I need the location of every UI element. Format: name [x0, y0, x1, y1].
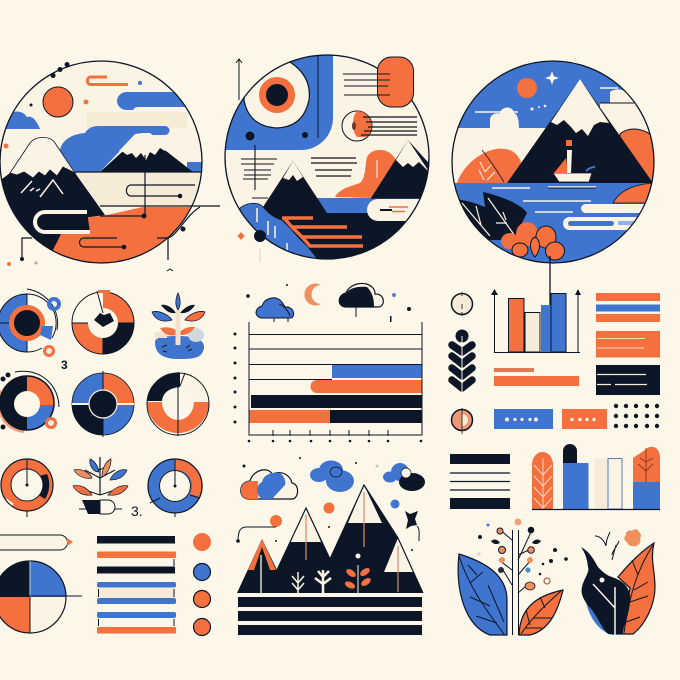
orange text block — [596, 331, 660, 358]
horizontal bar chart — [234, 322, 422, 442]
number 3 upper: 3 — [61, 358, 68, 372]
orange clock icon — [452, 408, 472, 434]
sand band — [75, 172, 205, 207]
bottom marker dot — [254, 230, 266, 242]
water lines — [492, 187, 596, 212]
tick marks — [273, 430, 388, 436]
centre mountain — [263, 161, 327, 228]
stem — [512, 530, 518, 635]
eye — [244, 62, 309, 128]
star — [545, 71, 559, 85]
boat — [548, 140, 596, 188]
orange leaf — [618, 543, 655, 634]
axes — [494, 290, 580, 352]
berries — [477, 518, 550, 590]
target ring — [262, 80, 292, 110]
pill with arrow — [0, 535, 73, 550]
stacked legend bars — [97, 536, 176, 634]
white cloud — [490, 108, 519, 128]
navy ground — [360, 213, 406, 253]
legend circles — [193, 533, 211, 636]
donut 5 — [72, 371, 134, 437]
tri-colour cloud — [241, 470, 298, 499]
bars — [508, 298, 524, 352]
snow cap — [551, 79, 609, 136]
orange diamond — [238, 232, 244, 240]
water strip — [317, 198, 420, 213]
vertical bar chart — [491, 289, 581, 352]
circle outline — [452, 61, 654, 263]
orange blob — [324, 502, 334, 514]
clouds above range — [236, 457, 425, 551]
blue leaf — [458, 554, 507, 635]
navy text block — [596, 365, 660, 395]
donut 9 — [148, 459, 203, 517]
birds — [530, 105, 546, 110]
orange leaf — [519, 590, 563, 635]
peak stems — [306, 492, 398, 592]
tree white — [292, 570, 331, 593]
cream bars — [595, 459, 608, 509]
water — [450, 183, 660, 263]
orange leaf — [532, 452, 553, 509]
navy feather leaf — [449, 330, 475, 393]
sprout in pot — [73, 457, 128, 514]
orange pill — [87, 77, 128, 84]
blue cloud — [310, 460, 354, 492]
legend stripes right — [596, 293, 660, 395]
dark cloud — [339, 283, 383, 307]
left mountain — [2, 168, 105, 250]
sparkles — [478, 535, 568, 575]
orange flower — [624, 529, 641, 546]
mountain — [507, 79, 653, 183]
donut 2 — [72, 290, 134, 354]
snow cap — [10, 137, 75, 178]
mountain range with trees — [237, 485, 423, 635]
white pill label — [367, 199, 425, 221]
twig marks — [595, 532, 619, 560]
heart centre — [94, 313, 114, 327]
orange dotted button — [562, 409, 607, 429]
orange tab — [378, 57, 414, 107]
navy star — [405, 511, 418, 529]
panel: circular mountain and boat landscape — [450, 60, 663, 320]
orange hill — [335, 150, 396, 198]
connector to bar chart — [549, 256, 551, 320]
blue cloud upper right — [117, 92, 190, 110]
botanical left — [458, 518, 568, 635]
blue cloud — [256, 298, 294, 318]
right mountain — [100, 148, 192, 172]
plant pot — [152, 293, 205, 359]
navy leaves — [455, 192, 527, 240]
blue dot — [390, 500, 400, 508]
y labels dots — [234, 332, 236, 424]
sparkles — [246, 284, 411, 322]
donut 6 — [147, 371, 209, 436]
blue cloud left — [6, 112, 40, 129]
quadrant pie — [0, 561, 82, 633]
sun — [43, 87, 73, 117]
orange label bars — [494, 368, 579, 386]
weather icons — [246, 283, 411, 322]
sky — [458, 62, 634, 128]
leaf column chart — [532, 444, 660, 510]
small orange ring — [46, 418, 56, 428]
botanical right — [581, 529, 655, 635]
land band — [450, 128, 660, 183]
right mountain — [371, 140, 428, 198]
orange terraces — [282, 218, 363, 246]
circle outline — [0, 61, 202, 263]
vertical rule — [317, 56, 319, 138]
orange and blue column — [633, 447, 660, 482]
panel: circular mountain landscape centre — [220, 50, 440, 265]
strata bars — [238, 597, 422, 607]
big blue cloud — [60, 126, 170, 172]
lines beside node — [361, 117, 417, 135]
blue panel dots — [246, 132, 308, 140]
donut 7 — [1, 459, 53, 517]
axes and gridlines — [249, 322, 422, 435]
right orange hill — [620, 128, 654, 181]
small node — [342, 111, 372, 141]
navy range — [237, 485, 423, 593]
bars — [249, 364, 422, 423]
caret — [167, 269, 173, 271]
lines mid left — [241, 145, 277, 198]
small dots — [4, 81, 142, 266]
arrow — [236, 59, 242, 100]
lines mid centre — [311, 158, 357, 176]
blue cloud — [240, 203, 320, 262]
panel: circular mountain landscape left — [0, 60, 220, 271]
blue edge — [585, 595, 622, 635]
dot grid — [614, 404, 659, 428]
upper right cloud — [610, 89, 634, 103]
peak caps — [248, 485, 413, 572]
circle outline — [225, 55, 429, 259]
navy leaf — [581, 547, 630, 634]
clock icon — [452, 292, 472, 316]
small orange ring — [44, 346, 54, 356]
navy arch — [563, 444, 577, 463]
left orange hill — [457, 149, 522, 183]
small blue ring — [49, 299, 59, 309]
three dots — [51, 62, 70, 78]
donut 4 — [0, 371, 59, 433]
donut 1 — [0, 289, 59, 356]
orange field — [53, 207, 191, 262]
blue sky block — [226, 56, 333, 150]
crescent moon — [304, 284, 321, 306]
text lines top right — [343, 74, 390, 95]
orange shore — [612, 183, 651, 204]
orange flower — [501, 222, 564, 260]
white foam bands — [563, 204, 644, 230]
blue and navy cloud — [383, 463, 425, 491]
tree orange — [344, 565, 372, 594]
tiny rays — [259, 248, 261, 262]
scattered dots — [242, 457, 413, 551]
navy line stack — [450, 454, 510, 509]
number 3 lower: 3. — [131, 503, 143, 519]
x labels dots — [248, 440, 422, 442]
outline of caps — [277, 485, 423, 593]
connector dots — [20, 194, 186, 261]
sun — [517, 78, 537, 98]
connector lines — [22, 155, 220, 260]
white pill — [35, 212, 90, 232]
blue dotted button — [494, 409, 553, 429]
orange node connector — [270, 515, 282, 527]
